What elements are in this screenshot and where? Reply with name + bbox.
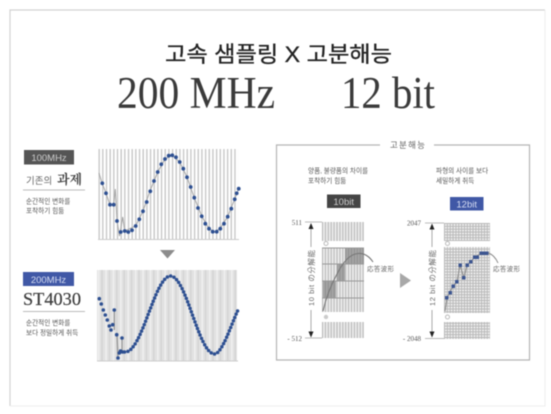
axis: 12bit resolution: - 2048	[403, 335, 421, 343]
chart: 12bit grid	[444, 223, 498, 339]
badge: 12bit	[450, 197, 484, 210]
axis: 12bit resolution	[403, 220, 444, 343]
text: 12bit caption: 세밀하게 취득	[436, 176, 474, 185]
text: 10bit caption: 양품, 불량품의 차이를	[308, 166, 368, 175]
axis: 12bit resolution: 12 bit の分解能	[427, 250, 437, 306]
badge: 10bit: 10bit	[333, 197, 354, 208]
heading: existing challenge: 기존의	[26, 176, 52, 187]
panel heading: 고분해능	[390, 140, 425, 150]
text: 12bit caption	[436, 166, 488, 185]
description: existing challenge: 순간적인 변화를	[26, 196, 70, 206]
arrow: down to ST4030	[160, 250, 175, 258]
axis: 10bit resolution: - 512	[287, 335, 302, 343]
panel: existing 100MHz labels	[23, 150, 85, 215]
text: 12bit caption: 파형의 사이를 보다	[436, 166, 488, 175]
chart: 10bit grid	[322, 222, 373, 338]
badge: 200MHz: 200MHz	[31, 275, 66, 286]
axis: 10bit resolution: 511	[292, 219, 302, 227]
heading: existing challenge: 과제	[57, 172, 82, 187]
badge: 10bit	[327, 194, 360, 208]
title: 고속 샘플링 X 고분해능	[165, 42, 392, 67]
heading: ST4030: ST4030	[23, 289, 81, 309]
description: ST4030: 순간적인 변화를	[26, 318, 70, 327]
headline: 200 MHz: 200 MHz	[117, 68, 275, 118]
axis: 10bit resolution	[287, 219, 322, 343]
headline: 12 bit: 12 bit	[341, 68, 435, 118]
text: 10bit caption: 포착하기 힘듦	[308, 176, 346, 185]
badge: 100MHz: 100MHz	[31, 153, 67, 164]
axis: 12bit resolution: 2047	[407, 220, 422, 228]
panel: ST4030 labels	[23, 272, 85, 337]
label: response waveform 10bit: 応答波形	[367, 264, 394, 273]
panel: high resolution box	[276, 145, 530, 360]
description: existing challenge	[26, 196, 70, 215]
axis: 10bit resolution: 10 bit の分解能	[306, 250, 316, 306]
label: response waveform 12bit: 応答波形	[493, 264, 520, 273]
chart: 100MHz sampling waveform	[98, 149, 241, 240]
description: ST4030	[26, 318, 78, 337]
chart: 200MHz sampling waveform	[97, 270, 238, 362]
heading: existing challenge	[26, 172, 82, 187]
description: existing challenge: 포착하기 힘듦	[26, 206, 64, 215]
badge: 12bit: 12bit	[456, 200, 477, 210]
arrow: 10bit to 12bit	[400, 273, 411, 288]
description: ST4030: 보다 정밀하게 취득	[26, 328, 78, 337]
text: 10bit caption	[308, 166, 368, 185]
